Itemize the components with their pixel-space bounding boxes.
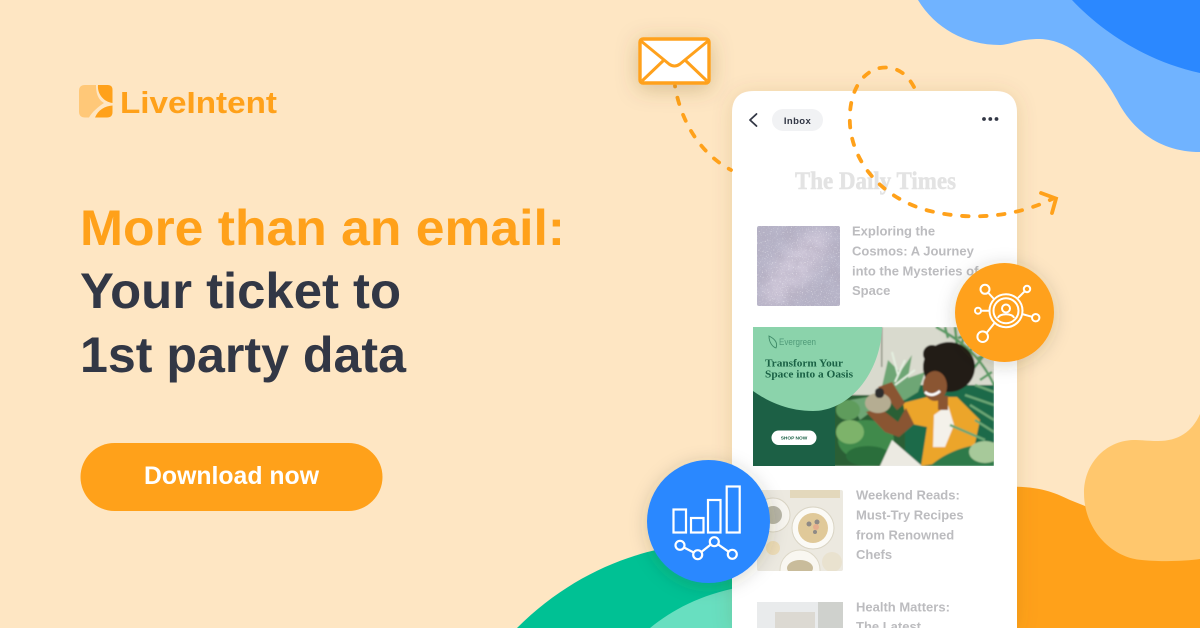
article: recipes xyxy=(757,490,963,571)
blob: orange bottom right xyxy=(1000,487,1200,628)
bars xyxy=(674,486,740,532)
blob: light blue top right xyxy=(918,0,1200,152)
ad button xyxy=(772,430,816,445)
article text xyxy=(852,224,979,298)
line chart xyxy=(676,537,737,559)
ad brand xyxy=(769,336,816,348)
article text: Space xyxy=(852,283,890,298)
article text xyxy=(856,488,964,562)
ad button: SHOP NOW xyxy=(781,436,808,442)
ad: Evergreen xyxy=(753,327,1001,466)
article text: Cosmos: A Journey xyxy=(852,244,975,258)
palm fronds xyxy=(936,327,994,385)
article image: health xyxy=(757,602,843,628)
blob: light green bottom xyxy=(650,587,740,628)
ad brand: Evergreen xyxy=(779,337,816,348)
article text: Chefs xyxy=(856,547,892,562)
woman xyxy=(903,397,980,466)
article text: Weekend Reads: xyxy=(856,488,960,502)
download button xyxy=(80,443,382,511)
newspaper masthead: The Daily Times xyxy=(795,168,956,195)
article text: Health Matters: xyxy=(856,600,950,614)
foreground leaves xyxy=(930,444,994,466)
ad background photo xyxy=(835,327,994,466)
icon: envelope xyxy=(640,39,709,83)
headline line 3: 1st party data xyxy=(80,327,407,383)
article: cosmos xyxy=(757,226,978,306)
article text: from Renowned xyxy=(856,528,954,542)
icon: bar and line chart badge xyxy=(647,460,770,583)
logo wordmark: LiveIntent xyxy=(120,85,277,120)
icon: back chevron xyxy=(750,114,756,126)
ad headline: Transform Your xyxy=(765,358,843,370)
blob: dark blue top right xyxy=(1072,0,1200,73)
logo xyxy=(79,85,277,120)
headline xyxy=(80,200,565,383)
blob: green bottom xyxy=(517,540,760,628)
panel: phone email inbox xyxy=(732,91,1017,628)
article text: Must-Try Recipes xyxy=(856,508,964,522)
icon: logo mark xyxy=(79,85,112,118)
article image: food xyxy=(757,490,843,571)
download button: Download now xyxy=(144,462,320,490)
article text: Exploring the xyxy=(852,224,935,238)
article: health xyxy=(757,600,950,628)
article text: into the Mysteries of xyxy=(852,264,979,278)
ad headline xyxy=(765,358,853,380)
icon: more dots xyxy=(982,117,998,121)
article image: galaxy xyxy=(757,226,840,306)
blob: light orange right xyxy=(1084,414,1200,561)
ad dark green panel xyxy=(753,391,835,466)
inbox pill: Inbox xyxy=(784,116,811,127)
ad light green shape xyxy=(753,327,882,411)
phone body xyxy=(732,91,1017,628)
article text xyxy=(856,600,950,628)
arrow: dashed path from envelope into phone xyxy=(675,86,731,170)
icon: network person badge xyxy=(955,263,1054,362)
ad headline: Space into a Oasis xyxy=(765,370,853,380)
headline line 2: Your ticket to xyxy=(80,263,401,319)
arrow: dashed loop to the right xyxy=(850,68,1056,216)
headline line 1: More than an email: xyxy=(80,200,565,256)
inbox pill xyxy=(772,109,823,131)
